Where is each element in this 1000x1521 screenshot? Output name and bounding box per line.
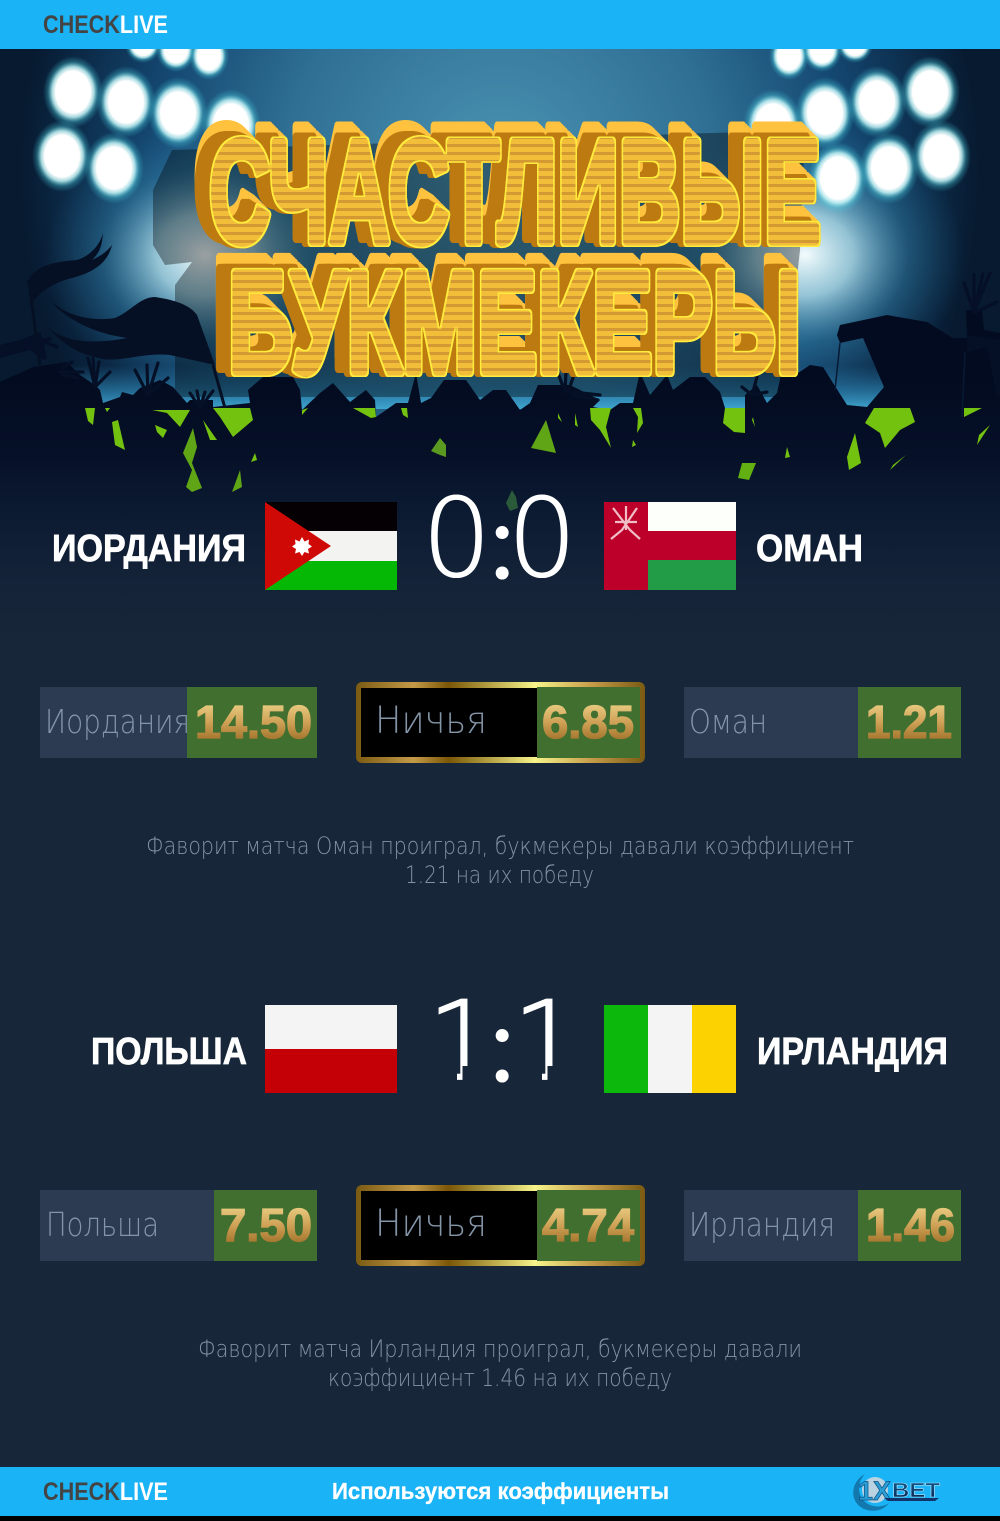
footer bar [0, 1467, 1000, 1516]
caption match 2: Фаворит матча Ирландия проиграл, букмекеры давали [198, 1335, 802, 1363]
top bar [0, 0, 1000, 49]
caption match 1: Фаворит матча Оман проиграл, букмекеры давали коэффициент [146, 832, 854, 860]
match 2 [92, 998, 946, 1093]
odds row 1 [40, 682, 961, 763]
team name: Jordan: ИОРДАНИЯ [52, 528, 246, 570]
logo: Checklive: CHECKLIVE [43, 11, 168, 39]
caption match 1 [146, 832, 854, 889]
odds: Jordan win [40, 687, 317, 758]
caption match 1: 1.21 на их победу [405, 861, 594, 889]
floodlights right [743, 27, 971, 214]
raised hands [40, 273, 997, 438]
body fade below the crowd [0, 518, 1000, 648]
odds: draw (highlighted): 6.85 [542, 696, 634, 748]
odds: draw (highlighted): Ничья [375, 699, 487, 742]
score 1:1: 1 [428, 978, 497, 1105]
odds: Poland win: 7.50 [220, 1199, 312, 1251]
flag: Oman [604, 502, 736, 590]
small leaf [506, 490, 518, 511]
floodlights left [32, 27, 261, 204]
icon: 1xBet logo: 1X [858, 1476, 891, 1506]
green field patches [85, 408, 990, 492]
title [209, 110, 821, 403]
footer logo: Checklive: CHECKLIVE [43, 1478, 168, 1506]
caption match 2 [198, 1335, 802, 1392]
footer note: Используются коэффициенты [332, 1478, 669, 1504]
team name: Oman: ОМАН [756, 528, 863, 570]
match 1 [52, 475, 863, 602]
score 1:1: : [487, 983, 518, 1105]
team name: Ireland: ИРЛАНДИЯ [757, 1031, 948, 1073]
odds: Jordan win: Иордания [45, 702, 190, 741]
score 0:0: : [487, 480, 518, 602]
odds: Poland win: Польша [46, 1205, 159, 1244]
odds: draw (highlighted): Ничья [375, 1202, 487, 1245]
odds: draw (highlighted) [356, 1185, 645, 1266]
odds: Oman win [684, 687, 961, 758]
odds: Oman win: Оман [689, 702, 767, 741]
hero: stadium illustration [0, 27, 1000, 648]
odds: Poland win [40, 1190, 317, 1261]
caption match 2: коэффициент 1.46 на их победу [328, 1364, 672, 1392]
odds row 2 [40, 1185, 961, 1266]
odds: Oman win: 1.21 [866, 696, 952, 748]
odds: Jordan win: 14.50 [195, 696, 312, 748]
score 1:1: 1 [512, 978, 582, 1105]
flag: Jordan [265, 502, 397, 590]
icon: 1xBet logo [853, 1474, 940, 1511]
title shadow [153, 130, 805, 397]
stadium field strip [60, 365, 940, 409]
score 0:0: 0 [422, 475, 491, 602]
odds: Ireland win: Ирландия [689, 1205, 835, 1244]
icon: 1xBet logo: BET [892, 1480, 940, 1502]
odds: Ireland win: 1.46 [866, 1199, 955, 1251]
score 0:0: 0 [508, 475, 577, 602]
score 1:1 [438, 998, 552, 1082]
odds: Ireland win [684, 1190, 961, 1261]
flag: Poland [265, 1005, 397, 1093]
odds: draw (highlighted) [356, 682, 645, 763]
team name: Poland: ПОЛЬША [91, 1031, 247, 1073]
odds: draw (highlighted): 4.74 [542, 1199, 634, 1251]
crowd silhouette [0, 233, 1000, 520]
flag: Ireland [604, 1005, 736, 1093]
score 0:0 [422, 475, 577, 602]
